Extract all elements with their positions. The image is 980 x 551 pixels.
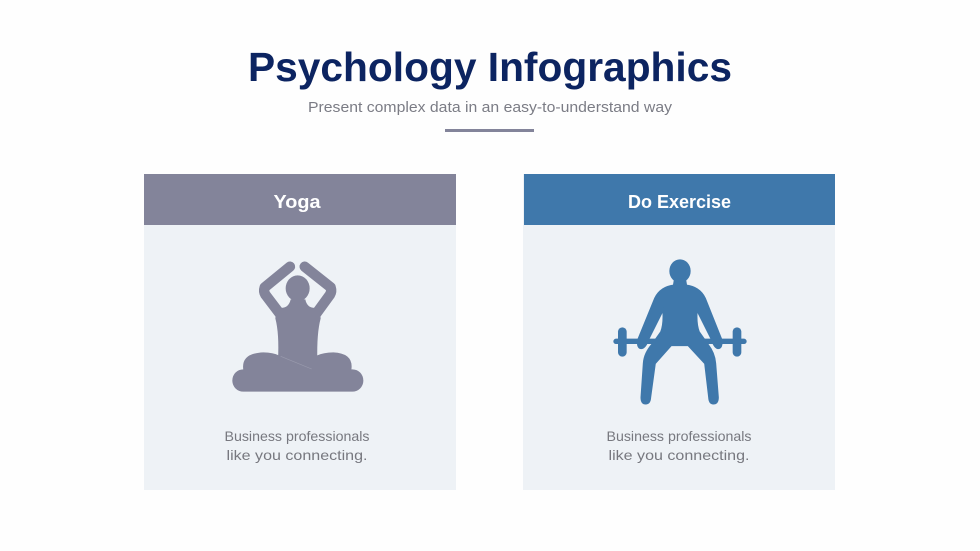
subtitle: Present complex data in an easy-to-understand way	[308, 99, 673, 116]
title underline	[445, 129, 534, 132]
title: Psychology Infographics	[248, 44, 732, 90]
exercise description: like you connecting.	[608, 447, 750, 463]
yoga description	[224, 428, 370, 463]
yoga panel background	[144, 174, 456, 490]
yoga description: like you connecting.	[226, 447, 368, 463]
icon: weightlifter	[613, 259, 747, 403]
yoga description: Business professionals	[224, 428, 370, 444]
exercise panel background	[523, 174, 835, 490]
panel: yoga	[144, 174, 456, 490]
exercise description: Business professionals	[606, 428, 752, 444]
yoga heading: Yoga	[274, 191, 321, 212]
exercise heading: Do Exercise	[628, 191, 731, 212]
exercise description	[606, 428, 752, 463]
yoga header bar	[144, 174, 456, 225]
exercise header bar	[524, 174, 835, 225]
panel: do exercise	[523, 174, 835, 490]
icon: meditating figure	[232, 267, 363, 392]
